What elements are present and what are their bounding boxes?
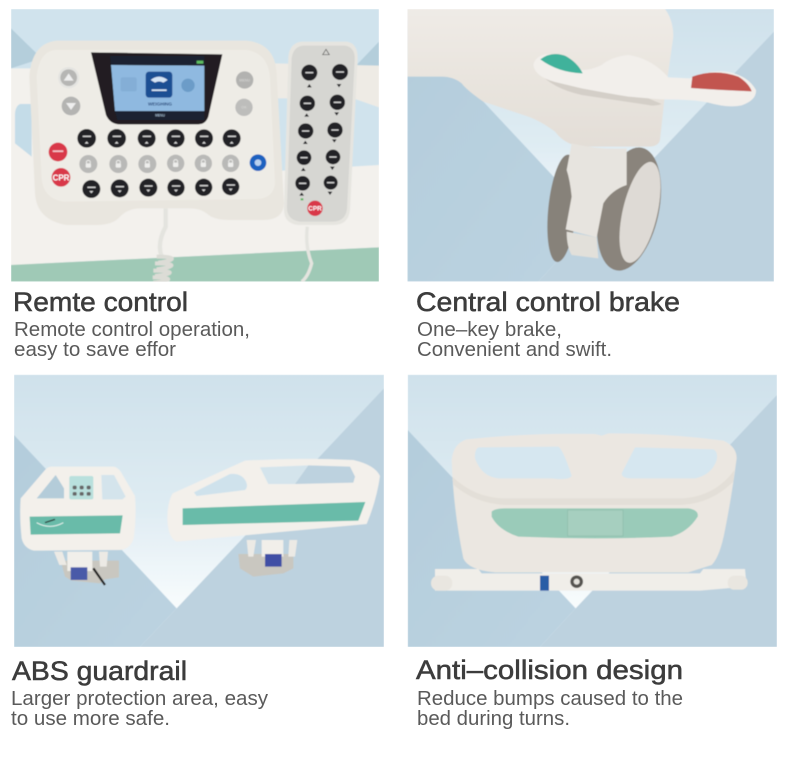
brake pedal xyxy=(533,54,756,106)
arrow and menu buttons: MENU xyxy=(239,78,250,82)
text: brake description: One–key brake, xyxy=(417,318,562,341)
text: remote control description: easy to save effor xyxy=(14,338,176,361)
caster wheel xyxy=(546,144,662,272)
red and blue buttons xyxy=(49,143,266,187)
text: anti-collision description: Reduce bumps caused to the xyxy=(417,687,683,710)
hand pendant xyxy=(284,42,358,225)
controller cable xyxy=(153,208,312,283)
text: brake description xyxy=(417,318,612,361)
heading: ABS guardrail: ABS guardrail xyxy=(12,656,187,686)
button glyphs xyxy=(83,136,236,193)
panel: central control brake photo xyxy=(407,9,774,282)
text: remote control description xyxy=(14,318,250,361)
arrow and menu buttons: OK xyxy=(241,106,247,110)
handle window xyxy=(15,104,32,157)
hand pendant: CPR xyxy=(308,206,322,213)
side rail xyxy=(11,68,379,265)
lock buttons xyxy=(79,155,239,173)
text: guardrail description xyxy=(11,687,269,730)
arrow and menu buttons xyxy=(58,67,253,116)
crossbar xyxy=(431,569,748,591)
text: remote control description: Remote control operation, xyxy=(14,318,250,341)
side guardrail xyxy=(167,459,380,577)
screen: MENU xyxy=(155,113,165,117)
bed frame xyxy=(407,9,673,147)
screen xyxy=(91,52,222,124)
main control panel xyxy=(29,41,284,225)
green panel strip xyxy=(11,247,379,282)
panel: ABS guardrail photo xyxy=(14,375,384,647)
screen: WEIGHING xyxy=(148,101,172,106)
head guardrail xyxy=(20,467,136,585)
text: brake description: Convenient and swift. xyxy=(417,338,612,361)
text: anti-collision description: bed during turns. xyxy=(417,707,570,730)
heading: remote control: Remte control xyxy=(13,287,188,317)
rail handle xyxy=(273,63,379,107)
text: guardrail description: to use more safe. xyxy=(11,707,170,730)
black function buttons xyxy=(77,129,241,198)
heading: central control brake: Central control brake xyxy=(416,287,680,317)
red and blue buttons: CPR xyxy=(53,173,70,182)
panel: anti-collision design photo xyxy=(408,375,777,647)
headboard xyxy=(452,433,737,572)
panel: remote control photo xyxy=(11,9,379,283)
heading: anti-collision design: Anti–collision design xyxy=(416,655,683,685)
text: guardrail description: Larger protection area, easy xyxy=(11,687,269,710)
text: anti-collision description xyxy=(417,687,683,730)
